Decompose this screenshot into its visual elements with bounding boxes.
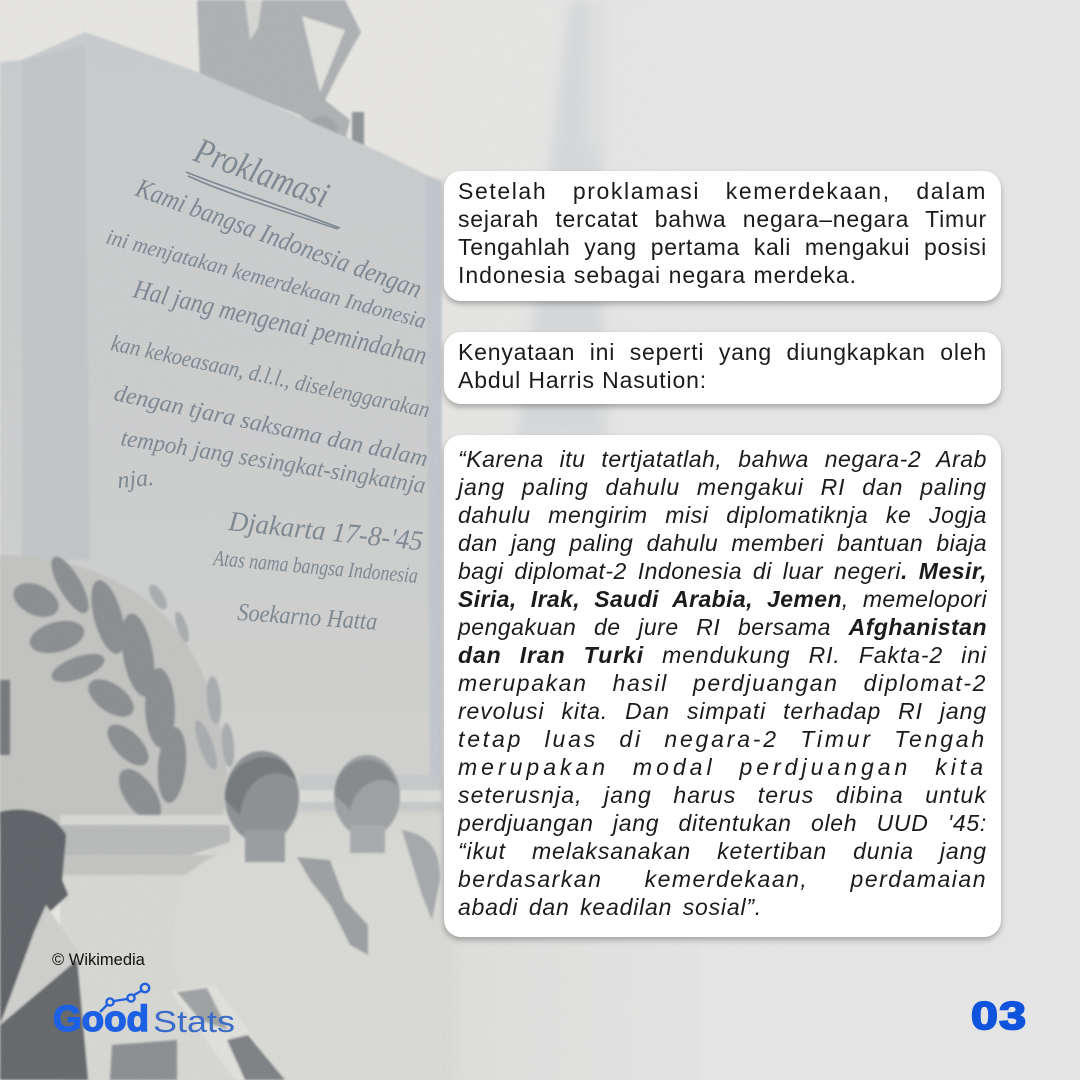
text: intro paragraph: sejarah tercatat bahwa negara–negara Timur: [458, 206, 987, 232]
text: intro paragraph: Setelah proklamasi kemerdekaan, dalam: [458, 178, 987, 204]
text: quotation by Abdul Harris Nasution: perdjuangan jang ditentukan oleh UUD '45:: [458, 810, 987, 836]
page number: 03: [971, 995, 1027, 1038]
handwritten proclamation: kan kekoeasaan, d.l.l., diselenggarakan: [109, 330, 432, 422]
panel: intro text: [444, 171, 1001, 301]
handwritten proclamation: nja.: [116, 465, 155, 494]
text: quotation by Abdul Harris Nasution: berdasarkan kemerdekaan, perdamaian: [458, 866, 987, 892]
men in white shirts: [170, 830, 442, 1080]
monument slab: [0, 32, 442, 830]
text: quotation by Abdul Harris Nasution: “Karena itu tertjatatlah, bahwa negara-2 Arab: [458, 446, 987, 472]
flag and pole: [516, 0, 608, 440]
text: quotation by Abdul Harris Nasution: Siria, Irak, Saudi Arabia, Jemen, memelopori: [458, 586, 987, 612]
text: quotation by Abdul Harris Nasution: revolusi kita. Dan simpati terhadap RI jang: [458, 698, 987, 724]
wreath of leaves: [0, 552, 236, 828]
handwritten proclamation: dengan tjara saksama dan dalam: [112, 380, 430, 472]
handwritten proclamation: Kami bangsa Indonesia dengan: [131, 172, 426, 304]
text: quotation by Abdul Harris Nasution: abadi dan keadilan sosial”.: [458, 894, 762, 920]
text: attribution paragraph: Abdul Harris Nasution:: [458, 367, 707, 393]
man in the foreground left: [0, 680, 285, 1080]
panel: quotation: [444, 435, 1001, 937]
text: intro paragraph: [458, 178, 987, 288]
text: quotation by Abdul Harris Nasution: pengakuan de jure RI bersama Afghanistan: [458, 614, 987, 640]
text: quotation by Abdul Harris Nasution: dan Iran Turki mendukung RI. Fakta-2 ini: [458, 642, 987, 668]
handwritten proclamation: Atas nama bangsa Indonesia: [211, 545, 419, 588]
text: quotation by Abdul Harris Nasution: bagi diplomat-2 Indonesia di luar negeri. Mesir,: [458, 558, 987, 584]
statue on top of the monument: [197, 0, 364, 155]
logo wordmark: Good: [53, 998, 149, 1039]
text: quotation by Abdul Harris Nasution: tetap luas di negara-2 Timur Tengah: [458, 726, 987, 752]
lower ground area: [60, 775, 700, 1080]
text: intro paragraph: Indonesia sebagai negara merdeka.: [458, 262, 857, 288]
panel: attribution text: [444, 332, 1001, 404]
man head right: [334, 755, 400, 853]
logo icon: rising line chart: [100, 984, 149, 1012]
text: quotation by Abdul Harris Nasution: seterusnja, jang harus terus dibina untuk: [458, 782, 987, 808]
handwritten proclamation: Hal jang mengenai pemindahan: [130, 273, 430, 370]
image credit: © Wikimedia: [52, 951, 145, 969]
text: quotation by Abdul Harris Nasution: “ikut melaksanakan ketertiban dunia jang: [458, 838, 987, 864]
logo: GoodStats: Stats: [153, 1004, 235, 1039]
handwritten proclamation: Soekarno Hatta: [237, 599, 378, 636]
text: quotation by Abdul Harris Nasution: dan jang paling dahulu memberi bantuan biaja: [458, 530, 987, 556]
text: attribution paragraph: Kenyataan ini seperti yang diungkapkan oleh: [458, 339, 987, 365]
handwritten proclamation: Proklamasi: [188, 130, 335, 215]
handwritten proclamation: Djakarta 17-8-'45: [226, 506, 424, 557]
handwritten proclamation: ini menjatakan kemerdekaan Indonesia: [104, 224, 429, 333]
text: quotation by Abdul Harris Nasution: [455, 446, 988, 920]
text: attribution paragraph: [458, 339, 987, 393]
text: quotation by Abdul Harris Nasution: jang paling dahulu mengakui RI dan paling: [458, 474, 987, 500]
man head left: [225, 751, 299, 862]
text: intro paragraph: Tengahlah yang pertama kali mengakui posisi: [458, 234, 987, 260]
handwritten proclamation: [104, 130, 432, 636]
text: quotation by Abdul Harris Nasution: merupakan modal perdjuangan kita: [458, 754, 987, 780]
logo: GoodStats: [53, 982, 235, 1039]
handwritten proclamation: tempoh jang sesingkat-singkatnja: [119, 425, 427, 499]
text: quotation by Abdul Harris Nasution: dahulu mengirim misi diplomatiknja ke Jogja: [458, 502, 987, 528]
text: quotation by Abdul Harris Nasution: merupakan hasil perdjuangan diplomat-2: [458, 670, 987, 696]
